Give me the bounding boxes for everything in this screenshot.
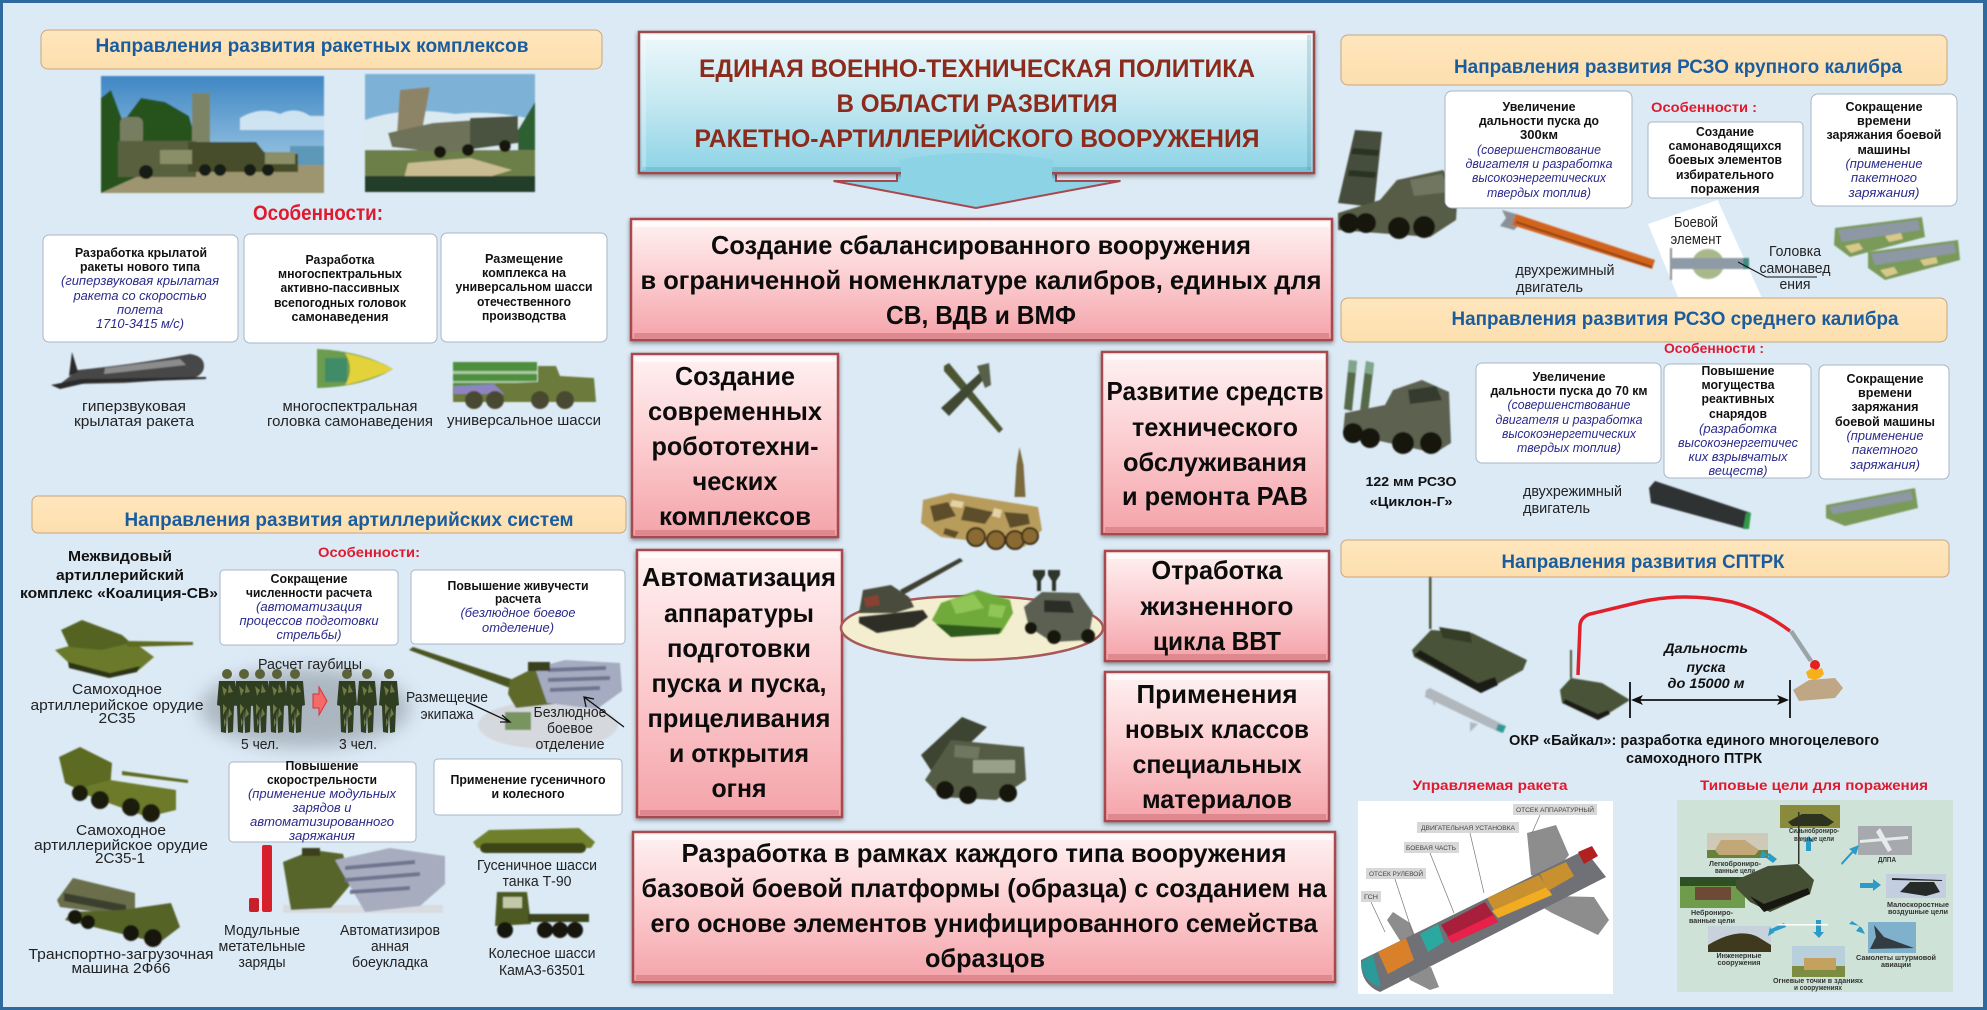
target captions: ванные цели: [1794, 834, 1834, 843]
icon: rocket pods: [1834, 217, 1960, 280]
target photo: heavy armour: [1780, 805, 1840, 828]
caption: universal chassis: универсальное шасси: [447, 413, 601, 429]
feature box: reload time: пакетного: [1851, 170, 1917, 185]
heading: heavy MLRS: [1341, 35, 1947, 85]
caption: crew of howitzer: Расчет гаубицы: [258, 657, 362, 673]
feature box: seekers: [244, 234, 437, 343]
box: special materials: Применения: [1136, 679, 1298, 709]
box: automation: прицеливания: [648, 703, 830, 733]
box: life cycle: цикла ВВТ: [1153, 626, 1281, 656]
subheading: typical targets: Типовые цели для поражения: [1700, 777, 1928, 793]
box: automation: подготовки: [667, 633, 811, 663]
caption: combat element: [1670, 215, 1722, 248]
feature box: projectile power: [1664, 363, 1811, 478]
feature box: range: (совершенствование: [1477, 142, 1601, 157]
box: maintenance: технического: [1132, 412, 1298, 442]
subheading: guided missile: Управляемая ракета: [1412, 777, 1568, 793]
feature box: crew survivability: расчета: [495, 591, 542, 606]
label: launch range: пуска: [1686, 659, 1726, 675]
caption: wheeled chassis: КамАЗ-63501: [499, 963, 585, 979]
caption: combat element: Боевой: [1674, 215, 1718, 231]
feature box: range: [1476, 363, 1661, 463]
caption: 2S35: [30, 682, 204, 727]
caption: dual-mode engine: двигатель: [1523, 501, 1590, 517]
caption: tracked chassis: танка Т-90: [502, 874, 572, 890]
caption: cruise missile: крылатая ракета: [74, 414, 195, 430]
feature box: crew reduction: численности расчета: [246, 585, 373, 600]
box: base platform: Разработка в рамках каждого типа вооружения: [682, 838, 1286, 868]
caption: autoloader: Автоматизиров: [340, 923, 440, 939]
trajectory: missile flight: [1578, 597, 1790, 675]
diagram: missile cutaway: [1358, 801, 1613, 994]
caption: dual-mode engine: двигатель: [1516, 280, 1583, 296]
caption: cruise missile: гиперзвуковая: [82, 399, 186, 415]
feature box: guided elements: поражения: [1690, 181, 1760, 196]
icon: small ATGM vehicle: [1560, 650, 1630, 720]
feature box: rate of fire: скорострельности: [267, 772, 377, 787]
feature box: guided elements: Создание: [1696, 124, 1754, 139]
target captions: авиации: [1881, 960, 1911, 969]
icon: large ATGM vehicle: [1412, 577, 1527, 693]
feature box: range: (совершенствование: [1508, 397, 1630, 412]
box: life cycle: жизненного: [1139, 591, 1294, 621]
box: automation: [637, 550, 842, 817]
feature box: new cruise missile: (гиперзвуковая крылатая: [61, 273, 219, 288]
box: automation: огня: [712, 773, 766, 803]
feature box: reload time: заряжания): [1847, 185, 1920, 200]
feature box: range: [1445, 91, 1632, 208]
dimension: launch range: [1630, 680, 1790, 718]
target captions: сооружения: [1718, 958, 1760, 967]
missile part labels: ОТСЕК РУЛЕВОЙ: [1369, 869, 1423, 878]
feature box: crew survivability: отделение): [482, 620, 554, 635]
white panel: combat element: [1648, 200, 1762, 297]
icon: drone: [941, 363, 1003, 433]
box: balanced armament: [631, 219, 1332, 340]
label: launch range: Дальность: [1663, 640, 1748, 656]
feature box: projectile power: Повышение: [1702, 363, 1774, 378]
box: base platform: базовой боевой платформы (образца) с созданием на: [642, 873, 1327, 903]
caption: seeker head: головка самонаведения: [267, 414, 433, 430]
caption: wheeled chassis: Колесное шасси: [488, 946, 596, 962]
caption: seeker head: самонавед: [1760, 261, 1831, 277]
icon: SPG 2S35: [55, 620, 193, 678]
icon: universal chassis: [453, 362, 596, 409]
heading: missile complexes: [41, 30, 602, 69]
target photo: UAV: [1858, 826, 1912, 855]
feature box: reload time: боевой машины: [1835, 414, 1935, 429]
icon: tracked chassis: [473, 828, 595, 853]
heading: missile complexes: Направления развития ракетных комплексов: [96, 36, 528, 57]
panel: artillery systems: [20, 496, 626, 979]
feature box: guided elements: [1648, 122, 1803, 198]
icon: seeker head: [317, 349, 393, 388]
box: balanced armament: Создание сбалансированного вооружения: [711, 230, 1251, 260]
subheading: features: Особенности :: [1664, 340, 1764, 356]
heading: SPTRK: [1341, 540, 1949, 577]
caption: modular charges: Модульные: [224, 923, 300, 939]
heading: heavy MLRS: Направления развития РСЗО крупного калибра: [1454, 57, 1902, 78]
feature box: new cruise missile: ракеты нового типа: [80, 259, 201, 274]
diagram: typical targets: [1677, 800, 1953, 992]
feature box: crew reduction: процессов подготовки: [240, 613, 378, 628]
feature box: rate of fire: зарядов и: [292, 800, 352, 815]
caption: dual-mode engine: [1523, 484, 1622, 517]
caption: unmanned compartment: [534, 705, 606, 753]
icon: wheeled chassis: [495, 892, 589, 938]
caption: unmanned compartment: боевое: [547, 721, 593, 737]
subheading: features: Особенности :: [1651, 99, 1757, 115]
icon: heavy MLRS launcher: [1338, 130, 1458, 239]
box: life cycle: [1105, 551, 1329, 661]
box: robotic complexes: [632, 354, 838, 537]
icon: tactical missile launcher: [921, 447, 1042, 549]
feature box: crew survivability: Повышение живучести: [448, 578, 589, 593]
icon: rocket with dual-mode engine: [1500, 210, 1655, 269]
caption: combat element: элемент: [1670, 232, 1722, 248]
subheading: features: Особенности:: [253, 202, 383, 225]
caption: 2F66: Транспортно-загрузочная: [28, 947, 214, 963]
box: robotic complexes: комплексов: [659, 501, 811, 531]
feature box: new cruise missile: ракета со скоростью: [73, 288, 207, 303]
feature box: crew survivability: (безлюдное боевое: [460, 605, 576, 620]
target photo: light armour: [1707, 833, 1768, 858]
panel: heavy MLRS: [1338, 35, 1960, 297]
target captions: и сооружениях: [1794, 983, 1843, 992]
box: base platform: его основе элементов унифицированного семейства: [650, 908, 1318, 938]
box: special materials: новых классов: [1125, 714, 1309, 744]
box: robotic complexes: современных: [648, 396, 823, 426]
target captions: Легкоброниро-: [1709, 859, 1761, 868]
arrow: unmanned compartment: [584, 697, 624, 727]
caption: crew size before: 5 чел.: [241, 737, 279, 753]
icon: modular charges: [249, 845, 272, 912]
label: launch range: [1663, 640, 1748, 691]
missile part labels: ОТСЕК АППАРАТУРНЫЙ: [1516, 805, 1594, 814]
feature box: crew reduction: стрельбы): [276, 627, 342, 642]
feature box: reload time: времени: [1857, 113, 1911, 128]
feature box: guided elements: самонаводящихся: [1668, 138, 1782, 153]
box: base platform: [633, 832, 1335, 982]
icon: platform with vehicles: [841, 558, 1103, 660]
caption: seeker head: [1760, 244, 1831, 293]
feature box: universal chassis: универсальном шасси: [456, 279, 592, 294]
feature box: projectile power: веществ): [1708, 463, 1768, 478]
target captions: ДЛПА: [1878, 855, 1896, 864]
icon: autoloader: [283, 848, 445, 913]
caption: 2S35-1: 2С35-1: [95, 851, 145, 867]
caption: Tsiklon-G: «Циклон-Г»: [1370, 494, 1452, 509]
box: life cycle: Отработка: [1152, 555, 1283, 585]
target photo: engineering: [1708, 926, 1771, 952]
feature box: tracked and wheeled: Применение гусеничного: [450, 772, 606, 787]
caption: seeker head: Головка: [1769, 244, 1822, 260]
caption: dual-mode engine: двухрежимный: [1523, 484, 1622, 500]
box: maintenance: Развитие средств: [1106, 376, 1324, 406]
feature box: range: твердых топлив): [1517, 440, 1621, 455]
feature box: seekers: многоспектральных: [278, 266, 403, 281]
box: maintenance: [1102, 352, 1327, 534]
heading: artillery systems: [32, 496, 626, 533]
box: balanced armament: в ограниченной номенклатуре калибров, единых для: [640, 265, 1322, 295]
feature box: range: Увеличение: [1532, 369, 1606, 384]
panel: medium MLRS: [1341, 298, 1949, 529]
feature box: rate of fire: (применение модульных: [248, 786, 396, 801]
feature box: range: высокоэнергетических: [1472, 170, 1606, 185]
feature box: range: двигателя и разработка: [1496, 412, 1642, 427]
box: base platform: образцов: [925, 943, 1045, 973]
icon: soldiers with crew reduction: [200, 668, 410, 748]
icon: missile hitting tank: [1789, 630, 1843, 701]
caption: dual-mode engine: двухрежимный: [1516, 263, 1614, 279]
caption: 2S35: Самоходное: [72, 682, 162, 698]
caption: autoloader: анная: [371, 939, 409, 955]
heading: SPTRK: Направления развития СПТРК: [1502, 552, 1785, 573]
feature box: reload time: (применение: [1846, 156, 1922, 171]
icon: 122 mm MLRS: [1343, 360, 1451, 454]
feature box: universal chassis: Размещение: [485, 251, 563, 266]
caption: dual-mode engine: [1516, 263, 1614, 296]
box: balanced armament: СВ, ВДВ и ВМФ: [886, 300, 1076, 330]
text: Baikal R&D: ОКР «Байкал»: разработка единого многоцелевого: [1509, 732, 1879, 749]
box: automation: Автоматизация: [642, 562, 836, 592]
feature box: guided elements: боевых элементов: [1668, 152, 1782, 167]
feature box: reload time: заряжания: [1852, 399, 1918, 414]
caption: modular charges: метательные: [218, 939, 306, 955]
feature box: reload time: заряжания): [1849, 457, 1920, 472]
box: robotic complexes: робототехни-: [652, 431, 818, 461]
feature box: universal chassis: отечественного: [477, 294, 571, 309]
heading: Koalitsiya-SV complex: комплекс «Коалиция-СВ»: [20, 585, 218, 602]
feature box: reload time: машины: [1858, 142, 1910, 157]
feature box: range: 300км: [1520, 127, 1558, 142]
feature box: crew reduction: Сокращение: [270, 571, 348, 586]
feature box: reload time: времени: [1858, 385, 1912, 400]
feature box: seekers: самонаведения: [292, 309, 388, 324]
caption: cruise missile: [74, 399, 195, 430]
feature box: projectile power: реактивных: [1702, 391, 1775, 406]
title block with arrow: В ОБЛАСТИ РАЗВИТИЯ: [836, 90, 1118, 118]
heading: medium MLRS: Направления развития РСЗО среднего калибра: [1452, 309, 1899, 330]
panel: SPTRK: [1341, 540, 1953, 994]
caption: Tsiklon-G: 122 мм РСЗО: [1366, 474, 1456, 489]
feature box: rate of fire: автоматизированного: [250, 814, 394, 829]
feature box: guided elements: избирательного: [1676, 167, 1774, 182]
caption: crew compartment: экипажа: [420, 707, 474, 723]
feature box: reload time: (применение: [1846, 428, 1924, 443]
box: special materials: [1105, 672, 1329, 821]
caption: unmanned compartment: отделение: [536, 737, 604, 753]
feature box: crew survivability: [411, 570, 625, 644]
feature box: range: высокоэнергетических: [1502, 426, 1636, 441]
caption: crew size after: 3 чел.: [339, 737, 377, 753]
caption: seeker head: многоспектральная: [282, 399, 418, 415]
feature box: projectile power: могущества: [1702, 377, 1775, 392]
target captions: [1689, 826, 1949, 992]
caption: 2S35-1: Самоходное: [76, 823, 166, 839]
feature box: reload time: заряжания боевой: [1826, 127, 1942, 142]
target photo: attack aircraft: [1868, 922, 1916, 953]
heading: Koalitsiya-SV complex: Межвидовый: [68, 548, 172, 565]
feature box: new cruise missile: [43, 235, 238, 342]
target captions: Самолеты штурмовой: [1856, 953, 1936, 962]
feature box: reload time: Сокращение: [1846, 99, 1922, 114]
feature box: crew reduction: [220, 570, 398, 645]
feature box: rate of fire: [229, 758, 416, 843]
target captions: ванные цели: [1715, 866, 1755, 875]
caption: modular charges: заряды: [238, 955, 286, 971]
missile part labels: [1361, 804, 1597, 902]
icon: SPG 2S35-1: [59, 747, 188, 822]
feature box: reload time: [1811, 94, 1957, 206]
heading: medium MLRS: [1341, 298, 1947, 342]
caption: seeker head: [267, 399, 433, 430]
feature box: new cruise missile: 1710-3415 м/с): [96, 316, 184, 331]
heading: Koalitsiya-SV complex: [20, 548, 218, 602]
box: maintenance: обслуживания: [1123, 447, 1307, 477]
caption: tracked chassis: [477, 858, 597, 890]
caption: Tsiklon-G: [1366, 474, 1456, 509]
feature box: range: двигателя и разработка: [1466, 156, 1612, 171]
box: automation: пуска и пуска,: [652, 668, 826, 698]
missile part labels: ДВИГАТЕЛЬНАЯ УСТАНОВКА: [1421, 825, 1516, 832]
feature box: range: твердых топлив): [1487, 185, 1591, 200]
target photo: buildings: [1792, 946, 1845, 977]
leader line: seeker head: [1738, 262, 1817, 277]
feature box: projectile power: ких взрывчатых: [1688, 449, 1788, 464]
photo: coastal missile system: [101, 76, 324, 193]
box: robotic complexes: Создание: [675, 361, 795, 391]
feature box: universal chassis: производства: [482, 308, 567, 323]
target captions: Сильноброниро-: [1789, 826, 1839, 835]
text: Baikal R&D: самоходного ПТРК: [1626, 750, 1763, 767]
caption: autoloader: [340, 923, 440, 971]
caption: tracked chassis: Гусеничное шасси: [477, 858, 597, 874]
icon: ATGM missile: [1425, 688, 1506, 733]
caption: autoloader: боеукладка: [352, 955, 429, 971]
feature box: reload time: пакетного: [1852, 442, 1918, 457]
icon: rocket pod: [1826, 488, 1918, 526]
panel: central policy column: [631, 32, 1335, 982]
title block with arrow: ЕДИНАЯ ВОЕННО-ТЕХНИЧЕСКАЯ ПОЛИТИКА: [699, 55, 1255, 83]
box: automation: аппаратуры: [664, 598, 814, 628]
feature box: rate of fire: заряжания: [288, 828, 355, 843]
caption: modular charges: [218, 923, 306, 971]
target captions: ванные цели: [1689, 916, 1735, 925]
caption: crew compartment: [406, 690, 488, 723]
caption: seeker head: ения: [1780, 277, 1810, 293]
icon: rocket engine: [1649, 481, 1751, 529]
title block with arrow: РАКЕТНО-АРТИЛЛЕРИЙСКОГО ВООРУЖЕНИЯ: [694, 123, 1260, 153]
feature box: projectile power: высокоэнергетичес: [1678, 435, 1798, 450]
title block with arrow: [639, 32, 1314, 208]
feature box: rate of fire: Повышение: [286, 758, 358, 773]
missile part labels: ГСН: [1364, 894, 1378, 901]
icon: central MLRS: [921, 717, 1026, 804]
caption: 2F66: машина 2Ф66: [72, 961, 170, 977]
caption: crew compartment: Размещение: [406, 690, 488, 706]
caption: 2S35: артиллерийское орудие: [30, 698, 204, 714]
caption: 2S35: 2С35: [98, 711, 136, 727]
caption: unmanned compartment: Безлюдное: [534, 705, 606, 721]
icon: combat element: [1670, 248, 1749, 280]
target captions: воздушные цели: [1888, 907, 1948, 916]
target captions: Огневые точки в зданиях: [1773, 976, 1864, 985]
feature box: universal chassis: комплекса на: [482, 265, 567, 280]
feature box: range: дальности пуска до 70 км: [1490, 383, 1648, 398]
missile part labels: БОЕВАЯ ЧАСТЬ: [1406, 845, 1456, 852]
caption: wheeled chassis: [488, 946, 596, 979]
box: special materials: специальных: [1132, 749, 1302, 779]
feature box: tracked and wheeled: [434, 759, 622, 815]
feature box: reload time: [1819, 365, 1949, 479]
feature box: seekers: Разработка: [306, 252, 375, 267]
central vehicle: [1736, 812, 1814, 912]
text: Baikal R&D: [1509, 732, 1879, 767]
feature box: new cruise missile: Разработка крылатой: [75, 245, 207, 260]
feature box: tracked and wheeled: и колесного: [492, 786, 565, 801]
label: launch range: до 15000 м: [1668, 675, 1745, 691]
caption: 2S35-1: артиллерийское орудие: [34, 838, 208, 854]
icon: howitzer with unmanned compartment: [409, 647, 622, 749]
subheading: features: Особенности:: [318, 544, 420, 560]
box: maintenance: и ремонта РАВ: [1122, 481, 1308, 511]
feature box: range: дальности пуска до: [1479, 113, 1599, 128]
caption: 2F66: [28, 947, 214, 977]
feature box: seekers: всепогодных головок: [274, 295, 406, 310]
heading: artillery systems: Направления развития артиллерийских систем: [124, 510, 574, 531]
box: automation: и открытия: [669, 738, 809, 768]
icon: loader 2F66: [57, 878, 180, 947]
blue arrows: [1760, 836, 1881, 938]
arrow: crew compartment: [467, 702, 510, 722]
target photo: helicopter: [1886, 874, 1946, 898]
target captions: Инженерные: [1716, 951, 1762, 960]
caption: 2S35-1: [34, 823, 208, 867]
target captions: Неброниро-: [1691, 908, 1733, 917]
target captions: Малоскоростные: [1887, 900, 1949, 909]
feature box: range: Увеличение: [1502, 99, 1576, 114]
feature box: reload time: Сокращение: [1846, 371, 1924, 386]
icon: hypersonic cruise missile: [51, 352, 206, 389]
box: robotic complexes: ческих: [692, 466, 778, 496]
feature box: projectile power: снарядов: [1709, 406, 1767, 421]
box: special materials: материалов: [1142, 784, 1292, 814]
feature box: projectile power: (разработка: [1699, 421, 1777, 436]
panel: missile complexes: [41, 30, 607, 430]
feature box: seekers: активно-пассивных: [280, 280, 400, 295]
feature box: new cruise missile: полета: [117, 302, 163, 317]
heading: Koalitsiya-SV complex: артиллерийский: [56, 567, 184, 584]
feature box: universal chassis: [441, 233, 607, 342]
target photo: unarmoured: [1680, 877, 1745, 908]
feature box: crew reduction: (автоматизация: [256, 599, 362, 614]
photo: launcher in the field: [365, 74, 535, 192]
